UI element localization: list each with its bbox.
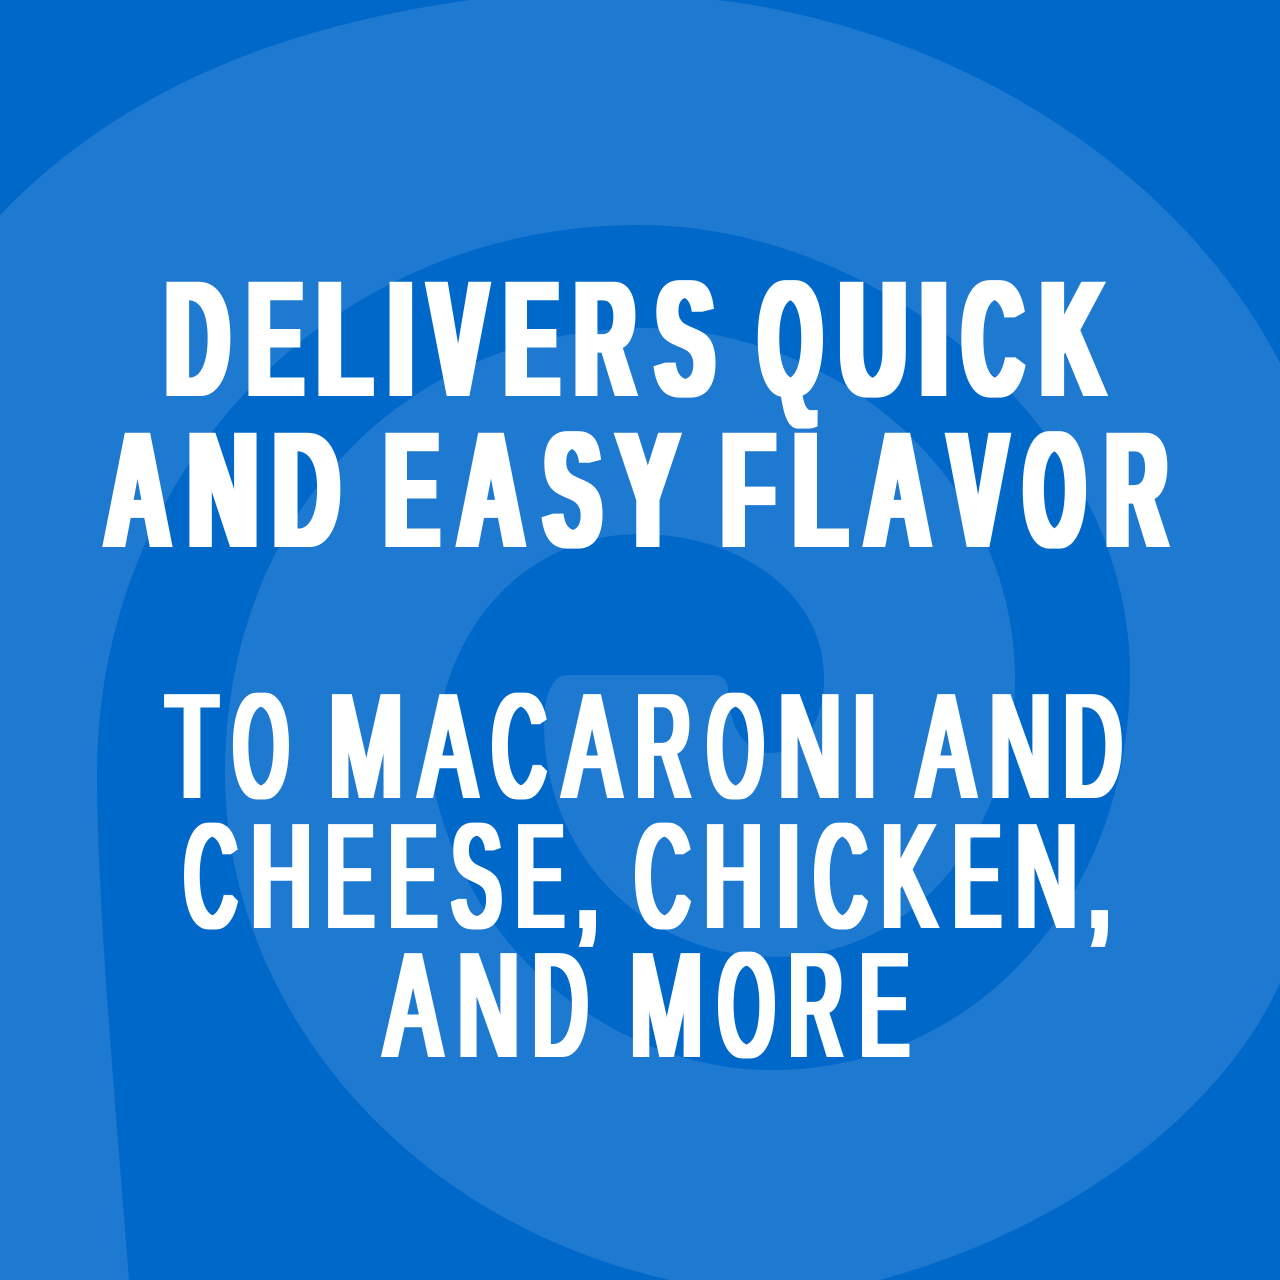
subheading line 2: E xyxy=(954,794,1000,959)
subheading line 2: N xyxy=(1016,794,1077,959)
heading line 1: K xyxy=(1041,247,1104,432)
subheading line 2: E xyxy=(327,794,373,959)
subheading line 3: N xyxy=(458,923,519,1088)
heading line 1: V xyxy=(429,247,487,432)
subheading line 2: I xyxy=(776,794,801,959)
heading line 1: S xyxy=(656,247,714,432)
subheading line 3: D xyxy=(533,923,587,1088)
heading line 1: I xyxy=(389,247,413,432)
subheading line 2: E xyxy=(390,794,436,959)
heading line 1: Q xyxy=(760,247,821,432)
subheading line 3: A xyxy=(386,923,441,1088)
heading line 2: A xyxy=(458,398,524,583)
heading line 2: A xyxy=(865,398,930,583)
heading line 1: C xyxy=(963,247,1023,432)
subheading line 1: A xyxy=(918,664,974,829)
heading line 1: D xyxy=(166,247,229,432)
heading line 1: L xyxy=(318,247,372,432)
subheading line 3: O xyxy=(719,923,774,1088)
subheading line 2: E xyxy=(517,794,563,959)
heading line 2: F xyxy=(722,398,775,583)
subheading line 1: A xyxy=(420,664,476,829)
heading line 2: N xyxy=(188,398,258,583)
heading line 1: U xyxy=(839,247,906,432)
subheading line 2: , xyxy=(1088,794,1111,959)
heading line 2: L xyxy=(794,398,847,583)
swirl: top-left corner xyxy=(0,0,470,215)
heading line 2: A xyxy=(105,398,170,583)
subheading line 1: D xyxy=(1064,664,1121,829)
subheading line 2: C xyxy=(185,794,236,959)
heading line 1: E xyxy=(505,247,558,432)
heading line 2: E xyxy=(385,398,438,583)
subheading line 2: S xyxy=(452,794,501,959)
subheading line 1: O xyxy=(708,664,763,829)
swirl: dark spiral band xyxy=(97,225,1130,1280)
heading line 2: R xyxy=(1106,398,1167,583)
subheading line 1: M xyxy=(329,664,403,829)
heading line 1: E xyxy=(248,247,303,432)
subheading line 1: N xyxy=(779,664,841,829)
heading line 2: S xyxy=(544,398,601,583)
subheading line 1: I xyxy=(852,664,877,829)
heading line 2: D xyxy=(273,398,339,583)
text: E xyxy=(861,923,908,1088)
subheading line 1: O xyxy=(234,664,288,829)
subheading line 3: R xyxy=(790,923,842,1088)
subheading line 3: M xyxy=(630,923,703,1088)
swirl: bottom-right corner xyxy=(880,983,1280,1280)
subheading line 2: C xyxy=(636,794,689,959)
subheading line 1: C xyxy=(493,664,545,829)
heading line 2: O xyxy=(1025,398,1084,583)
subheading line 1: R xyxy=(636,664,690,829)
heading line 2: Y xyxy=(617,398,678,583)
subheading line 1: T xyxy=(167,664,217,829)
heading line 1: I xyxy=(920,247,948,432)
subheading line 1: A xyxy=(564,664,620,829)
subheading line 2: , xyxy=(576,794,599,959)
subheading line 1: N xyxy=(990,664,1051,829)
subheading line 2: H xyxy=(252,794,311,959)
heading line 2: V xyxy=(949,398,1007,583)
subheading line 2: K xyxy=(882,794,936,959)
heading line 1: R xyxy=(575,247,635,432)
subheading line 2: H xyxy=(705,794,762,959)
subheading line 2: C xyxy=(815,794,866,959)
swirl: top-right corner xyxy=(718,0,1280,363)
